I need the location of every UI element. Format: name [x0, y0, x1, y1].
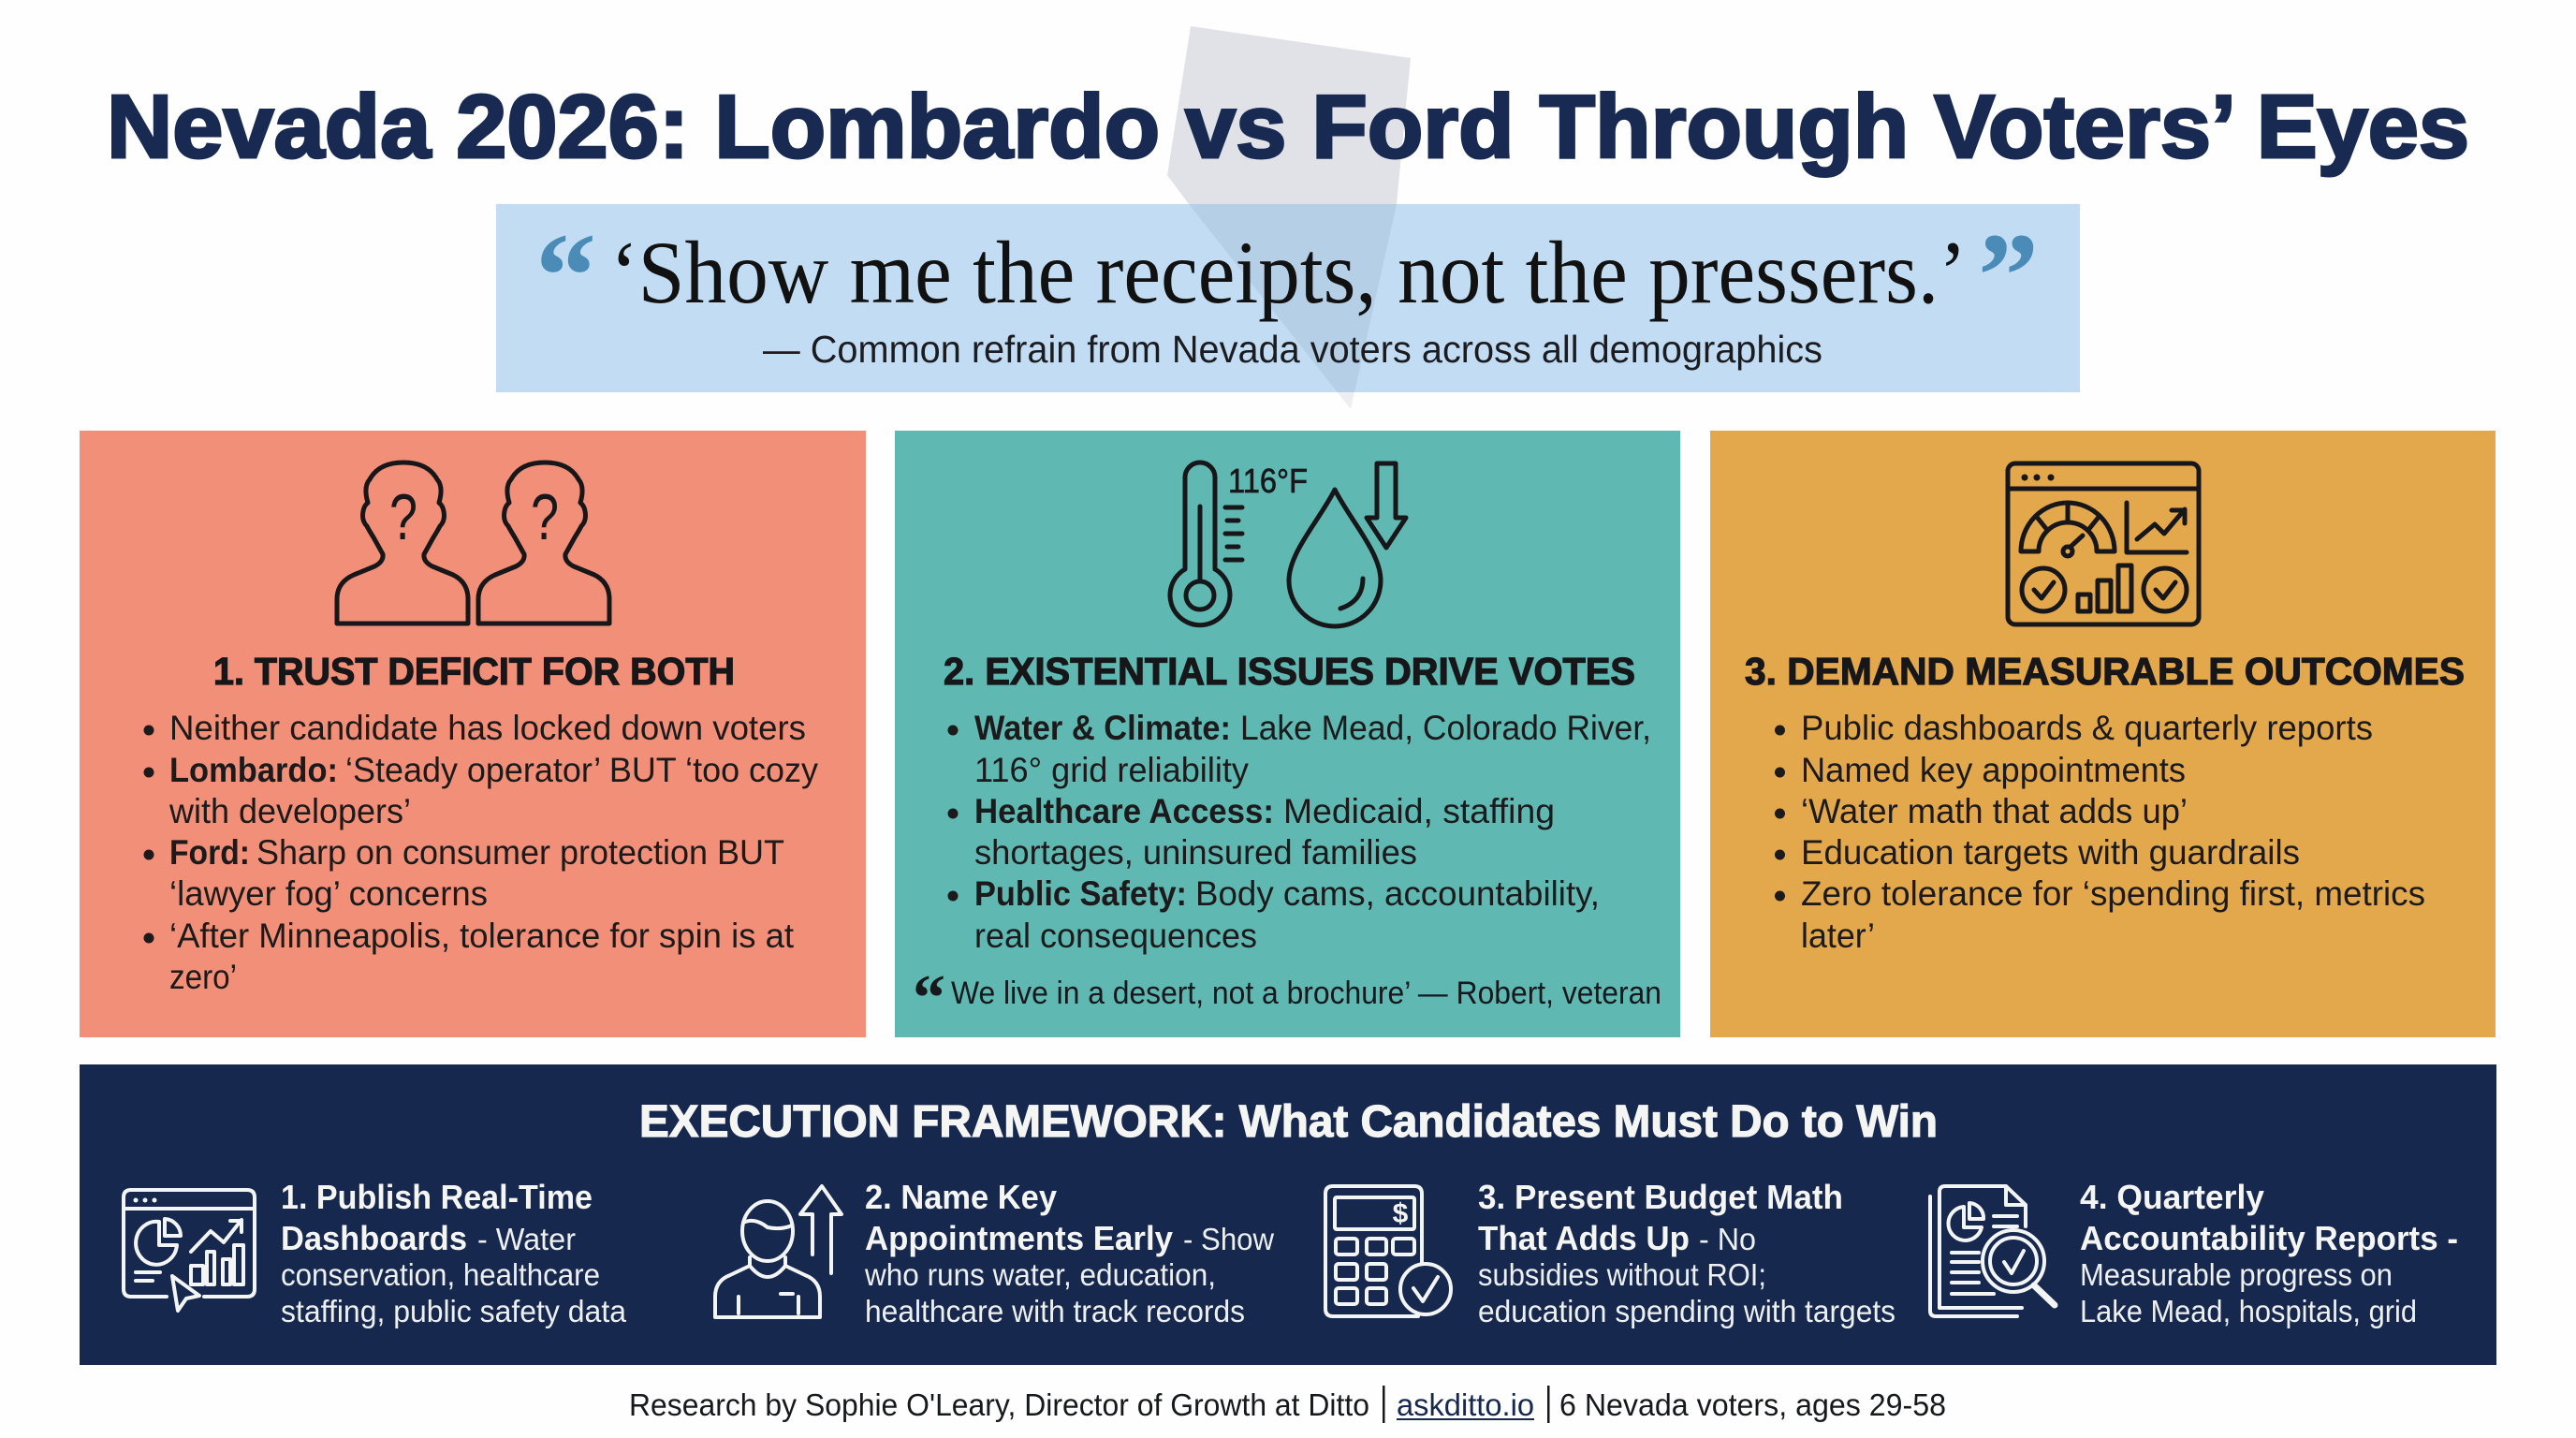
step text: who runs water, education, — [864, 1258, 1216, 1293]
bullet list: ‘Steady operator’ BUT ‘too cozy — [345, 751, 818, 789]
step text: - Water — [477, 1223, 576, 1257]
icon: two anonymous heads with question marks — [337, 462, 609, 624]
step text: conservation, healthcare — [281, 1258, 600, 1293]
bullet list: real consequences — [974, 917, 1257, 955]
bullet list: later’ — [1801, 917, 1875, 955]
icon: thermometer, water drop and down arrow: 116°F — [1228, 462, 1308, 500]
quote attribution: — Common refrain from Nevada voters across all demographics — [763, 328, 1822, 371]
footer credits: askditto.io — [1397, 1388, 1534, 1423]
framework heading: EXECUTION FRAMEWORK: What Candidates Must Do to Win — [639, 1097, 1938, 1147]
step 2: appointments — [715, 1178, 1275, 1329]
title: Nevada 2026: Lombardo vs Ford Through Voters’ Eyes — [107, 77, 2469, 177]
voter quote: We live in a desert, not a brochure’ — Robert, veteran — [951, 976, 1661, 1011]
step text: staffing, public safety data — [281, 1295, 626, 1329]
footer credits — [629, 1386, 1946, 1423]
step text: Dashboards — [281, 1219, 467, 1257]
panel: quote box — [496, 204, 2080, 392]
step 1: dashboards — [124, 1178, 626, 1329]
step text: Accountability Reports - — [2080, 1219, 2458, 1257]
bullet list: Healthcare Access: — [974, 792, 1274, 830]
step 3: budget — [1325, 1178, 1895, 1329]
bullet list: Named key appointments — [1801, 751, 2186, 789]
step text: subsidies without ROI; — [1478, 1258, 1766, 1293]
bullet list: shortages, uninsured families — [974, 833, 1417, 872]
quote text: ‘Show me the receipts, not the pressers.’ — [610, 223, 1967, 322]
bullet list: ‘After Minneapolis, tolerance for spin is at — [169, 917, 795, 955]
bullet list: Lake Mead, Colorado River, — [1240, 709, 1651, 747]
icon: report with magnifier — [1930, 1186, 2055, 1316]
bullet list: ‘lawyer fog’ concerns — [169, 874, 488, 913]
step text — [1478, 1178, 1895, 1329]
step text: education spending with targets — [1478, 1295, 1895, 1329]
icon: dashboard window — [2008, 463, 2199, 624]
step text: That Adds Up — [1478, 1219, 1690, 1257]
bullet list: Sharp on consumer protection BUT — [256, 833, 784, 872]
step text — [864, 1178, 1275, 1329]
step 4: reports — [1930, 1178, 2458, 1329]
bullet list: Education targets with guardrails — [1801, 833, 2300, 872]
icon: person with up arrow — [715, 1186, 842, 1317]
decorative Nevada state silhouette — [1167, 26, 1411, 409]
icon: closing quote mark: ” — [1978, 209, 2039, 344]
icon: thermometer, water drop and down arrow — [1170, 462, 1406, 626]
step text: 1. Publish Real-Time — [281, 1178, 593, 1216]
step text: - No — [1699, 1223, 1756, 1257]
bullet list: Water & Climate: — [974, 709, 1231, 747]
icon: calculator with check — [1325, 1186, 1451, 1316]
bullet list: zero’ — [169, 958, 237, 996]
step text: 2. Name Key — [865, 1178, 1057, 1216]
footer credits: Research by Sophie O'Leary, Director of Growth at Ditto — [629, 1388, 1369, 1423]
step text: healthcare with track records — [865, 1295, 1245, 1329]
heading: 2. EXISTENTIAL ISSUES DRIVE VOTES — [944, 650, 1635, 693]
panel: measurable outcomes — [1710, 431, 2496, 1037]
step text: Measurable progress on — [2080, 1258, 2393, 1293]
bullet list: with developers’ — [168, 792, 411, 830]
bullet list: Medicaid, staffing — [1283, 792, 1555, 830]
bullet list — [1775, 709, 2425, 955]
bullet list: 116° grid reliability — [974, 751, 1249, 789]
voter quote — [913, 962, 1661, 1034]
bullet list: Ford: — [169, 833, 250, 872]
bullet list: Public dashboards & quarterly reports — [1801, 709, 2373, 747]
icon: calculator with check: $ — [1393, 1198, 1409, 1229]
step text: 4. Quarterly — [2080, 1178, 2264, 1216]
footer credits: 6 Nevada voters, ages 29-58 — [1559, 1388, 1946, 1423]
bullet list: Public Safety: — [974, 874, 1187, 913]
panel: trust deficit — [80, 431, 866, 1037]
icon: two anonymous heads with question marks: ? — [531, 480, 559, 553]
step text: - Show — [1183, 1223, 1275, 1257]
icon: two anonymous heads with question marks: ? — [389, 480, 417, 553]
heading: 3. DEMAND MEASURABLE OUTCOMES — [1745, 650, 2465, 693]
bullet list: Neither candidate has locked down voters — [169, 709, 806, 747]
panel: execution framework — [80, 1064, 2496, 1365]
bullet list — [144, 709, 818, 996]
bullet list — [947, 709, 1651, 955]
heading: 1. TRUST DEFICIT FOR BOTH — [213, 650, 735, 693]
icon: opening quote mark: “ — [535, 209, 596, 344]
bullet list: Lombardo: — [169, 751, 338, 789]
icon: dashboard with cursor — [124, 1190, 255, 1311]
step text — [281, 1178, 626, 1329]
step text: Lake Mead, hospitals, grid — [2080, 1295, 2417, 1329]
step text: 3. Present Budget Math — [1478, 1178, 1843, 1216]
bullet list: ‘Water math that adds up’ — [1801, 792, 2188, 830]
step text — [2080, 1178, 2458, 1329]
bullet list: Zero tolerance for ‘spending first, metrics — [1801, 874, 2425, 913]
bullet list: Body cams, accountability, — [1195, 874, 1600, 913]
panel: existential issues — [895, 431, 1680, 1037]
quote — [535, 209, 2039, 371]
voter quote: “ — [913, 962, 945, 1034]
step text: Appointments Early — [865, 1219, 1173, 1257]
